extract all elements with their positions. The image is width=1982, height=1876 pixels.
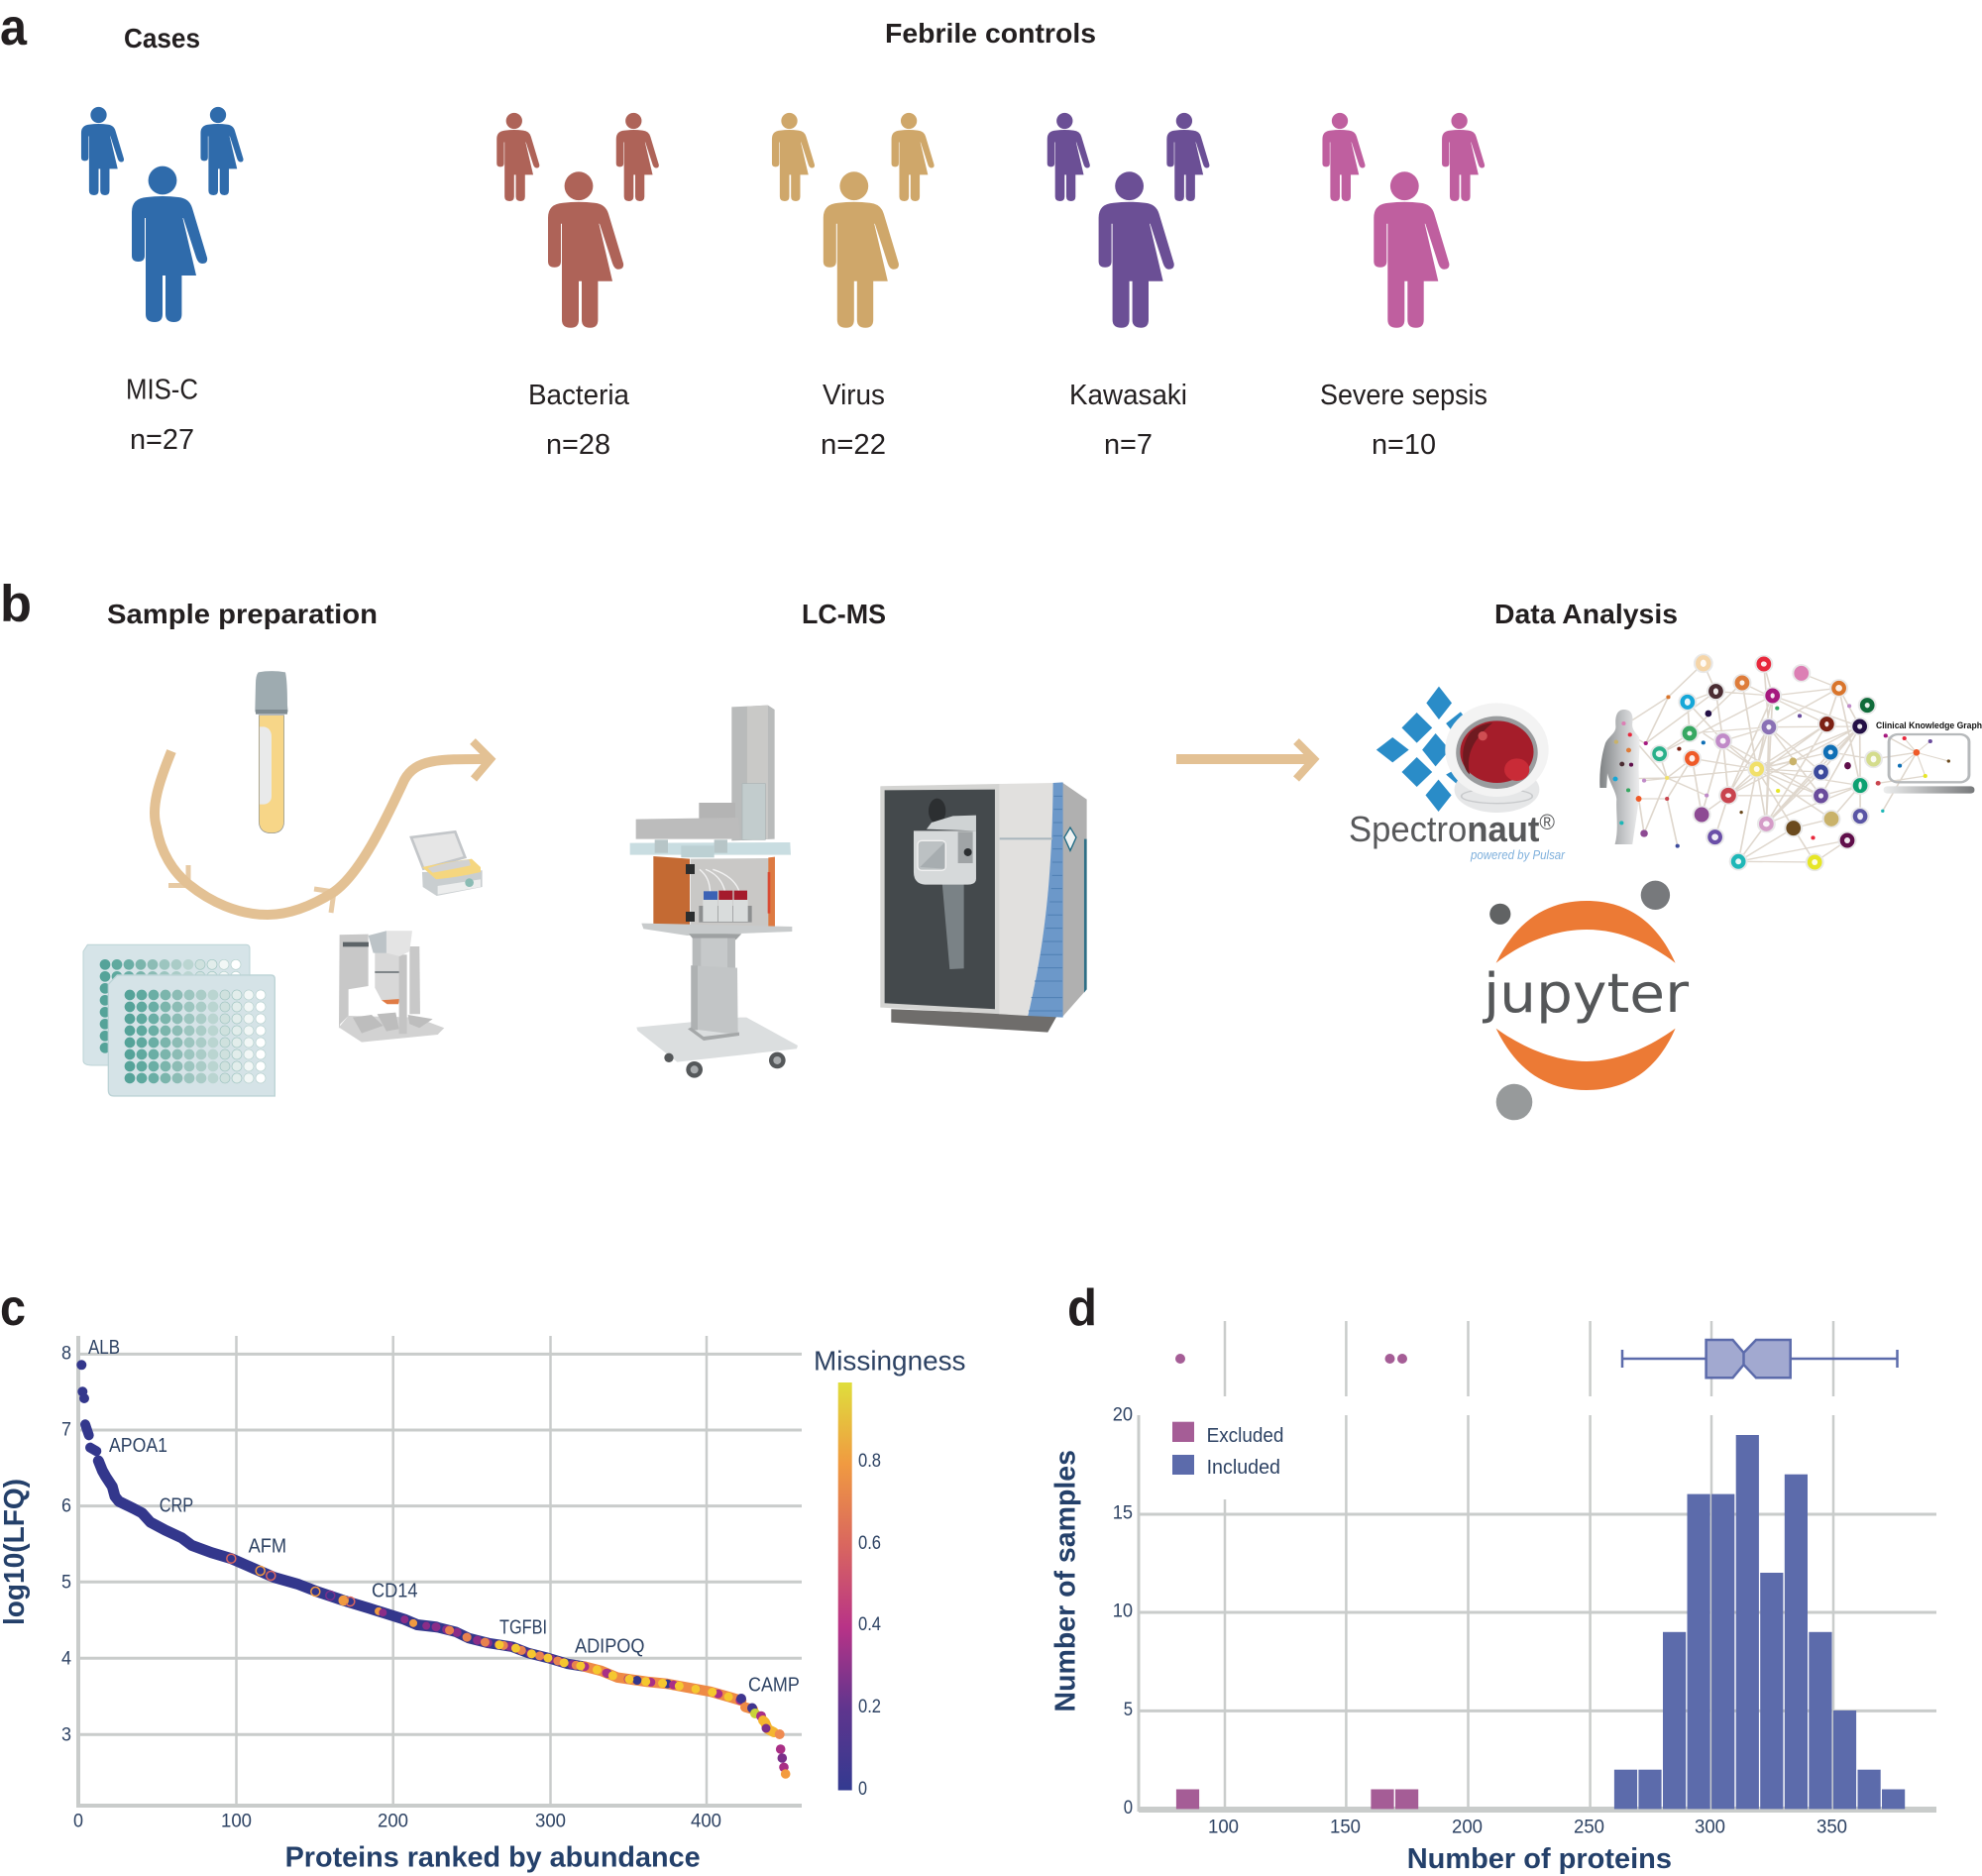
- panel a: cohort figures: [0, 0, 1487, 461]
- legend: missingness colour bar: Missingness: [814, 1346, 965, 1377]
- x axis ticks: [73, 1811, 721, 1831]
- group: Virus: Virus: [823, 380, 885, 411]
- network edges: [1615, 663, 1926, 862]
- y axis ticks: 0: [1124, 1798, 1133, 1819]
- legend: Included: [1207, 1457, 1280, 1479]
- logo: Jupyter: [1483, 881, 1690, 1120]
- x axis ticks: 100: [221, 1811, 252, 1831]
- panel c: abundance rank plot: [0, 1279, 965, 1873]
- text: Spectronaut wordmark: Spectronaut: [1349, 809, 1542, 849]
- annotations: protein names: CRP: [160, 1494, 193, 1516]
- panel letter a: a: [0, 0, 28, 56]
- notched boxplot: [1622, 1340, 1897, 1378]
- x axis ticks: 300: [535, 1811, 566, 1831]
- logo: Jupyter: jupyter: [1483, 962, 1690, 1025]
- group: Virus: [772, 113, 935, 461]
- icon: blood tube: [255, 671, 288, 833]
- legend: missingness colour bar: 0.2: [858, 1697, 881, 1717]
- y axis ticks: 5: [1124, 1700, 1133, 1720]
- histogram: excluded samples: [1176, 1790, 1418, 1809]
- x axis ticks: 350: [1817, 1818, 1847, 1837]
- group: Bacteria: n=28: [546, 429, 610, 461]
- group: MIS-C: [81, 107, 244, 456]
- text: Spectronaut wordmark: ®: [1539, 810, 1555, 834]
- y axis ticks: 15: [1113, 1503, 1133, 1524]
- x axis ticks: 300: [1695, 1818, 1725, 1837]
- annotations: protein names: AFM: [249, 1535, 286, 1557]
- histogram: included samples: [1614, 1435, 1905, 1809]
- logo: Spectronaut: [1376, 687, 1549, 813]
- outlier points: [1175, 1354, 1407, 1364]
- x axis ticks: 250: [1574, 1818, 1604, 1837]
- x axis title: Proteins ranked by abundance: [285, 1841, 701, 1873]
- y axis ticks: 5: [61, 1572, 71, 1594]
- legend: Excluded: [1207, 1425, 1283, 1447]
- text: Spectronaut wordmark: [1349, 809, 1566, 862]
- annotations: protein names: ADIPOQ: [575, 1635, 644, 1657]
- heading: Data Analysis: Data Analysis: [1494, 599, 1678, 629]
- chart: clinical knowledge graph: [1599, 654, 1982, 870]
- icon: heat shaker: [411, 831, 483, 896]
- icon: liquid handling robot: [339, 931, 444, 1043]
- annotations: protein names: CAMP: [748, 1675, 800, 1697]
- icon: mass spectrometer: [880, 782, 1087, 1033]
- human silhouette: [1599, 710, 1640, 844]
- group: Severe sepsis: n=10: [1372, 429, 1436, 461]
- annotations: protein names: TGFBI: [499, 1617, 547, 1639]
- arrow: LC-MS to data analysis: [1176, 741, 1314, 779]
- y axis ticks: [1113, 1405, 1133, 1819]
- panel letter c: c: [0, 1279, 26, 1337]
- y axis ticks: 10: [1113, 1601, 1133, 1622]
- panel letter d: d: [1067, 1279, 1097, 1337]
- x axis ticks: [1208, 1818, 1847, 1837]
- group: Virus: n=22: [821, 429, 886, 461]
- x axis ticks: 100: [1208, 1818, 1239, 1837]
- group: Bacteria: [496, 113, 659, 461]
- legend: missingness colour bar: 0.8: [858, 1451, 881, 1472]
- legend: missingness colour bar: 0.4: [858, 1614, 881, 1635]
- x axis title: Number of proteins: [1407, 1843, 1672, 1875]
- annotations: protein names: ALB: [88, 1337, 120, 1359]
- arrow: sample preparation path: [155, 741, 491, 915]
- y axis ticks: [61, 1344, 71, 1746]
- group: MIS-C: n=27: [130, 424, 194, 456]
- heading: LC-MS: LC-MS: [802, 599, 886, 629]
- annotations: protein names: [88, 1337, 800, 1697]
- y axis ticks: 8: [61, 1344, 71, 1364]
- x axis ticks: 400: [691, 1811, 721, 1831]
- panel letter b: b: [0, 575, 32, 632]
- legend: [1172, 1422, 1283, 1479]
- panel b: workflow: [0, 575, 1982, 1120]
- panel d: protein count distribution: [1050, 1279, 1936, 1875]
- icon: liquid chromatography instrument: [630, 706, 798, 1078]
- x axis ticks: 150: [1330, 1818, 1361, 1837]
- text: Spectronaut wordmark: powered by Pulsar: [1470, 847, 1566, 862]
- group: Severe sepsis: Severe sepsis: [1320, 380, 1487, 411]
- heading: Sample preparation: Sample preparation: [107, 599, 378, 629]
- legend: missingness colour bar: 0: [858, 1779, 867, 1800]
- group: Kawasaki: n=7: [1104, 429, 1153, 461]
- heading: Cases: Cases: [124, 23, 200, 54]
- legend: missingness colour bar: [814, 1346, 965, 1800]
- y axis ticks: 7: [61, 1419, 71, 1441]
- y axis ticks: 3: [61, 1724, 71, 1746]
- y axis ticks: 6: [61, 1496, 71, 1516]
- knowledge graph nodes: [1612, 654, 1888, 870]
- x axis ticks: 200: [1452, 1818, 1483, 1837]
- legend: missingness colour bar: 0.6: [858, 1533, 881, 1554]
- y axis ticks: 20: [1113, 1405, 1133, 1425]
- plot grid: [76, 1336, 802, 1806]
- annotations: protein names: APOA1: [109, 1435, 167, 1457]
- group: MIS-C: MIS-C: [126, 375, 198, 406]
- laptop: [1884, 734, 1974, 794]
- group: Kawasaki: [1047, 113, 1209, 461]
- icon: well plates: [83, 944, 275, 1096]
- x axis ticks: 0: [73, 1811, 83, 1831]
- group: Severe sepsis: [1320, 113, 1487, 461]
- y axis ticks: 4: [61, 1649, 71, 1669]
- heading: Febrile controls: Febrile controls: [885, 18, 1096, 49]
- y axis title: Number of samples: [1050, 1450, 1082, 1712]
- scatter: proteins: [76, 1360, 791, 1779]
- annotations: protein names: CD14: [372, 1580, 418, 1601]
- histogram grid: [1139, 1415, 1936, 1812]
- group: Bacteria: Bacteria: [528, 380, 630, 411]
- x axis ticks: 200: [378, 1811, 408, 1831]
- group: Kawasaki: Kawasaki: [1069, 380, 1187, 411]
- boxplot strip: [1175, 1321, 1897, 1396]
